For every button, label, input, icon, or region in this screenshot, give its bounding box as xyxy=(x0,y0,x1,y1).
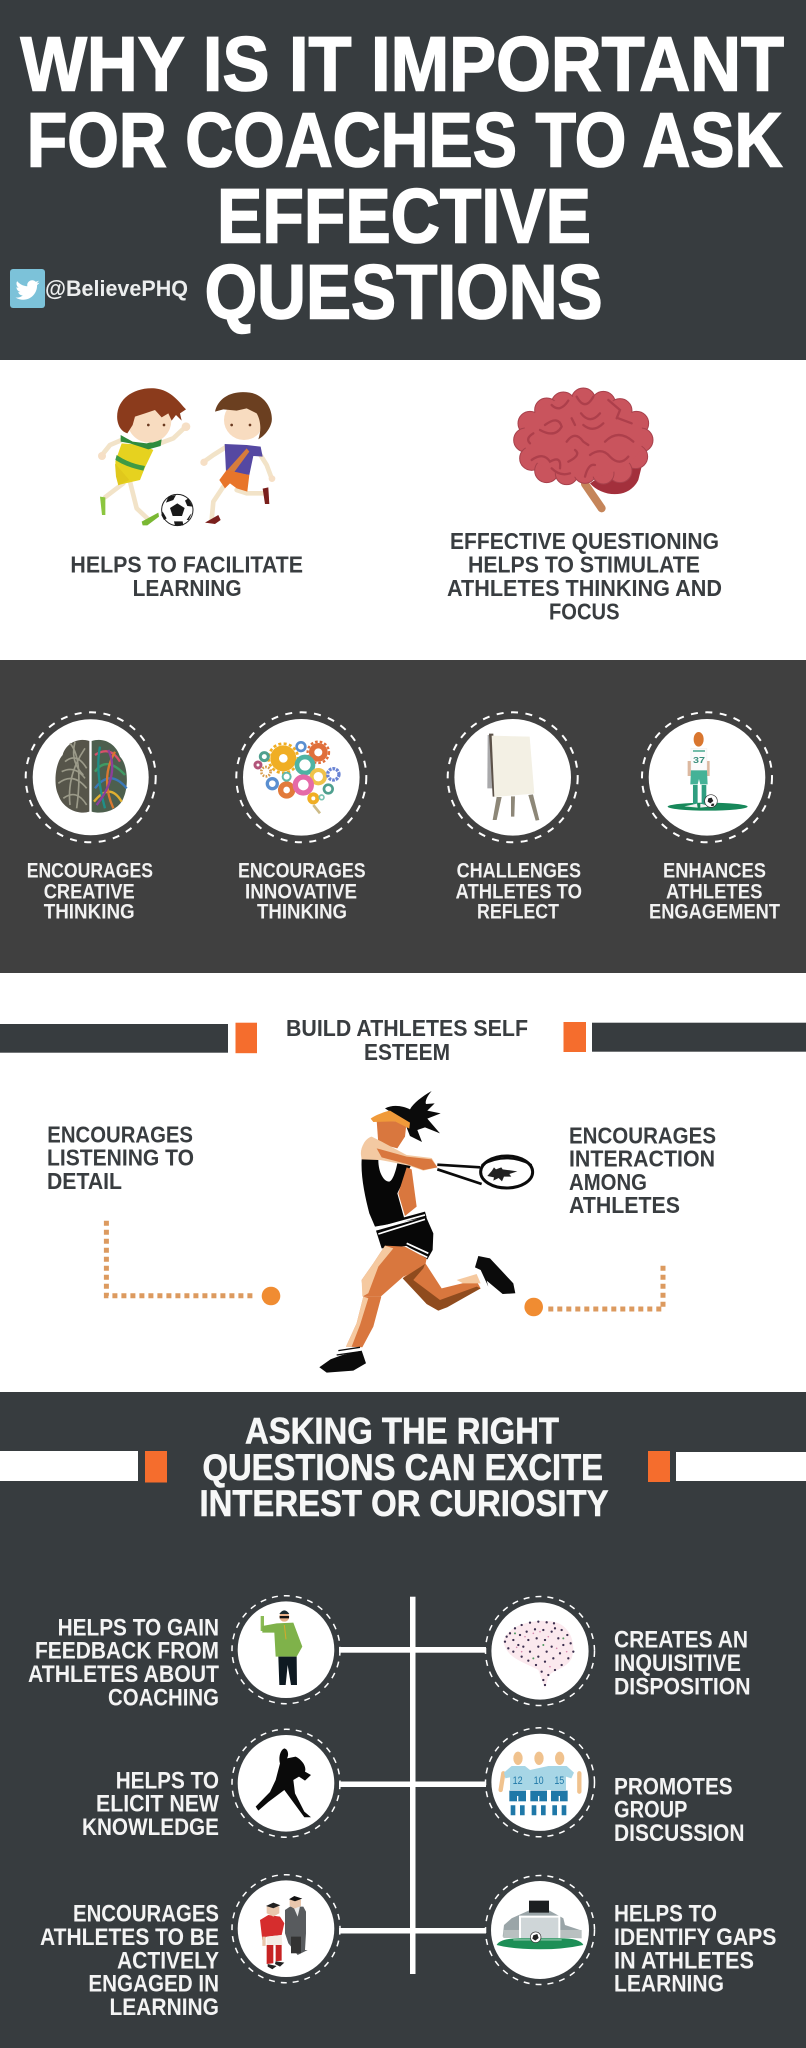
icon: gears brain xyxy=(255,742,339,813)
heading: INTEREST OR CURIOSITY xyxy=(200,1483,609,1524)
text: KNOWLEDGE xyxy=(82,1814,219,1841)
left banner bar xyxy=(0,1451,167,1482)
item: group discussion xyxy=(486,1728,744,1847)
text: effective questioning: EFFECTIVE QUESTIONING xyxy=(450,528,719,554)
text: GROUP xyxy=(614,1797,687,1824)
label: CREATIVE xyxy=(44,880,135,903)
text: ATHLETES TO BE xyxy=(40,1924,219,1951)
heading: ASKING THE RIGHT xyxy=(245,1410,559,1451)
twitter handle: @BelievePHQ xyxy=(45,276,188,301)
text: LEARNING xyxy=(614,1971,724,1998)
label: CHALLENGES xyxy=(457,859,581,882)
label xyxy=(238,859,366,923)
icon: twitter bird xyxy=(10,269,45,308)
text: INQUISITIVE xyxy=(614,1650,741,1677)
label xyxy=(456,859,582,923)
text: DISCUSSION xyxy=(614,1820,744,1847)
icon: rugby player silhouette xyxy=(256,1748,311,1817)
text: effective questioning xyxy=(447,528,722,625)
text: HELPS TO GAIN xyxy=(58,1614,219,1641)
heading: QUESTIONS CAN EXCITE xyxy=(202,1447,603,1488)
icon: brain xyxy=(514,388,653,508)
text: interaction among athletes: ATHLETES xyxy=(569,1192,680,1218)
item: identify gaps xyxy=(486,1876,776,1998)
item: engagement xyxy=(642,712,780,923)
heading: build athletes self esteem: ESTEEM xyxy=(364,1039,450,1065)
icon: multicoloured brain xyxy=(55,740,127,813)
text: helps to facilitate learning: LEARNING xyxy=(133,575,242,601)
label: ENCOURAGES xyxy=(27,859,153,882)
label: THINKING xyxy=(257,900,347,923)
icon: two boys playing football xyxy=(98,388,275,526)
text: interaction among athletes: INTERACTION xyxy=(569,1146,715,1172)
text: effective questioning: HELPS TO STIMULATE xyxy=(468,552,700,578)
text: interaction among athletes xyxy=(569,1122,716,1218)
panel: learning and focus xyxy=(0,360,806,660)
text: ATHLETES ABOUT xyxy=(28,1661,219,1688)
heading: build athletes self esteem xyxy=(286,1015,528,1065)
label: ENCOURAGES xyxy=(238,859,366,882)
text: HELPS TO xyxy=(614,1901,717,1928)
panel: excite interest or curiosity xyxy=(0,1392,806,2048)
heading xyxy=(200,1410,609,1524)
icon: three players xyxy=(501,1752,579,1815)
text: ACTIVELY xyxy=(117,1947,219,1974)
icon: dotted brain xyxy=(503,1621,573,1688)
label: THINKING xyxy=(44,900,135,923)
text: listening to detail: LISTENING TO xyxy=(47,1145,194,1171)
icon: footballer number 37 xyxy=(668,732,748,811)
item: innovative thinking xyxy=(236,712,366,923)
title: EFFECTIVE xyxy=(217,174,591,260)
text: interaction among athletes: AMONG xyxy=(569,1169,647,1195)
label xyxy=(649,859,780,923)
label: INNOVATIVE xyxy=(245,880,357,903)
text xyxy=(40,1901,219,2021)
heading: build athletes self esteem: BUILD ATHLETES SELF xyxy=(286,1015,528,1041)
timeline connector xyxy=(339,1597,486,1974)
right banner bar xyxy=(648,1451,806,1482)
text: FEEDBACK FROM xyxy=(35,1638,219,1665)
item: reflect xyxy=(448,712,582,923)
panel: self esteem xyxy=(0,973,806,1392)
item: creative thinking xyxy=(26,712,156,923)
icon: three players: 12 xyxy=(513,1775,523,1787)
panel: header xyxy=(0,0,806,360)
item: inquisitive disposition xyxy=(486,1596,751,1706)
text: DISPOSITION xyxy=(614,1673,751,1700)
text: COACHING xyxy=(108,1684,219,1711)
text: listening to detail xyxy=(47,1121,194,1194)
text xyxy=(82,1767,219,1841)
icon: player and manager xyxy=(260,1896,308,1969)
icon: footballer number 37: 37 xyxy=(693,755,705,765)
text xyxy=(28,1614,219,1711)
label: ENHANCES xyxy=(663,859,766,882)
icon: goal and stadium xyxy=(497,1901,583,1949)
text: ELICIT NEW xyxy=(96,1791,219,1818)
text: LEARNING xyxy=(110,1994,219,2021)
item: gain feedback xyxy=(28,1596,340,1711)
label xyxy=(27,859,153,923)
item: actively engaged xyxy=(40,1875,340,2021)
text xyxy=(614,1773,744,1847)
title: QUESTIONS xyxy=(205,249,603,335)
text: ENCOURAGES xyxy=(73,1901,219,1928)
text: helps to facilitate learning: HELPS TO FACILITATE xyxy=(70,552,303,578)
text: interaction among athletes: ENCOURAGES xyxy=(569,1122,716,1148)
text: helps to facilitate learning xyxy=(70,552,303,601)
icon: flip chart easel xyxy=(487,734,539,821)
panel: thinking benefits xyxy=(0,660,806,973)
label: ENGAGEMENT xyxy=(649,900,780,923)
text: effective questioning: ATHLETES THINKING AND xyxy=(447,575,722,601)
label: ATHLETES TO xyxy=(456,880,582,903)
text: IN ATHLETES xyxy=(614,1947,754,1974)
arrow: left dotted connector xyxy=(106,1221,280,1305)
text: IDENTIFY GAPS xyxy=(614,1924,776,1951)
arrow: right dotted connector xyxy=(524,1266,663,1316)
left banner bar xyxy=(0,1023,257,1053)
text: PROMOTES xyxy=(614,1773,733,1800)
text xyxy=(614,1901,776,1998)
label: ATHLETES xyxy=(666,880,762,903)
text: ENGAGED IN xyxy=(88,1971,219,1998)
label: REFLECT xyxy=(477,900,559,923)
text: HELPS TO xyxy=(116,1767,219,1794)
text: effective questioning: FOCUS xyxy=(549,599,620,625)
text: listening to detail: ENCOURAGES xyxy=(47,1121,193,1147)
text: CREATES AN xyxy=(614,1627,748,1654)
right banner bar xyxy=(564,1022,806,1052)
icon: three players: 15 xyxy=(554,1775,564,1787)
item: elicit new knowledge xyxy=(82,1729,340,1841)
icon: racket xyxy=(437,1156,533,1188)
title xyxy=(20,22,784,335)
icon: coach xyxy=(261,1610,302,1685)
icon: three players: 10 xyxy=(534,1775,544,1787)
text xyxy=(614,1627,751,1700)
icon: tennis player xyxy=(319,1091,533,1373)
text: listening to detail: DETAIL xyxy=(47,1168,122,1194)
